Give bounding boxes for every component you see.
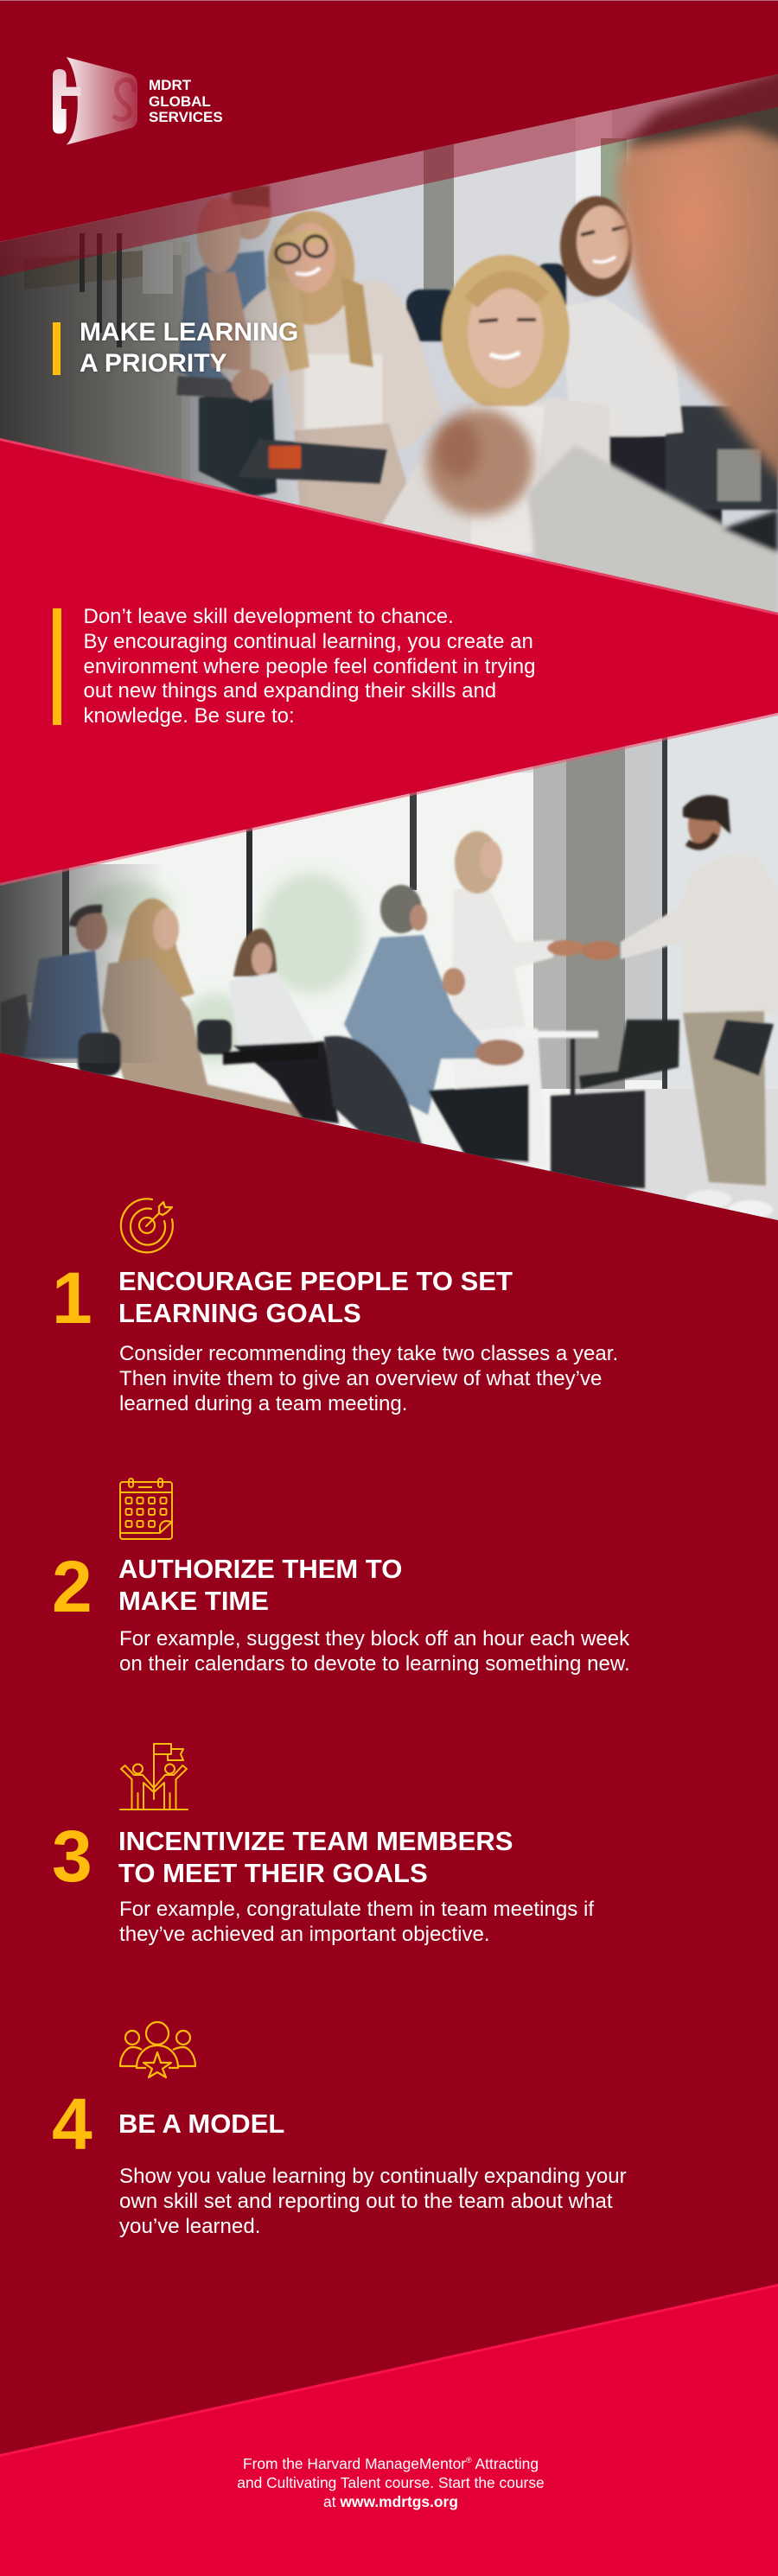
presenter foreground	[426, 60, 778, 516]
intro text: knowledge. Be sure to:	[83, 704, 295, 728]
footer band	[0, 2284, 778, 2576]
icon: target with arrow	[121, 1199, 173, 1252]
step 1 text: Then invite them to give an overview of what they’ve	[119, 1367, 602, 1390]
step 3 title	[118, 1826, 513, 1888]
step 3 text	[119, 1898, 595, 1946]
step 1 text	[119, 1342, 618, 1415]
desk and phone	[238, 439, 387, 484]
step 2 title: AUTHORIZE THEM TO	[118, 1554, 402, 1584]
step 1 text: Consider recommending they take two classes a year.	[119, 1342, 618, 1365]
footer credit: From the Harvard ManageMentor® Attracting	[243, 2455, 539, 2472]
step 4 text: you’ve learned.	[119, 2215, 260, 2238]
step 3 title: INCENTIVIZE TEAM MEMBERS	[118, 1826, 513, 1856]
top photo: seminar audience	[0, 60, 778, 622]
intro text	[83, 605, 535, 728]
step 1 text: learned during a team meeting.	[119, 1392, 408, 1415]
top edge line	[0, 0, 778, 1]
left dark overlay	[0, 181, 299, 505]
chairs	[406, 289, 458, 341]
logo wordmark: SERVICES	[149, 109, 223, 125]
standing woman	[451, 1028, 546, 1170]
step 2 title	[118, 1554, 402, 1616]
step 2 text: on their calendars to devote to learning something new.	[119, 1652, 630, 1676]
intro text: By encouraging continual learning, you create an	[83, 630, 533, 653]
standing man	[621, 855, 778, 1014]
number 1: 1	[52, 1257, 92, 1339]
intro accent bar	[53, 608, 61, 725]
heading: MAKE LEARNING	[80, 318, 298, 347]
heading: A PRIORITY	[80, 349, 227, 378]
step 4 text	[119, 2165, 627, 2238]
table and chair	[516, 1031, 598, 1038]
step 1 title	[118, 1266, 513, 1328]
blonde woman	[212, 281, 443, 449]
footer credit	[237, 2455, 545, 2510]
grey-haired man	[344, 935, 484, 1115]
logo mark	[53, 57, 137, 145]
blonde woman centre	[380, 398, 610, 553]
step 1 title: LEARNING GOALS	[118, 1298, 361, 1328]
heading accent bar	[53, 322, 61, 375]
intro text: out new things and expanding their skills and	[83, 679, 496, 703]
logo wordmark: MDRT	[149, 77, 191, 93]
man in blue	[177, 251, 272, 385]
red intro panel	[0, 438, 778, 883]
footer credit: and Cultivating Talent course. Start the course	[237, 2474, 545, 2491]
step 4 text: own skill set and reporting out to the team about what	[119, 2190, 613, 2213]
brunette woman	[562, 298, 683, 436]
step 3 title: TO MEET THEIR GOALS	[118, 1858, 428, 1888]
intro text: Don’t leave skill development to chance.	[83, 605, 454, 628]
step 2 text	[119, 1627, 630, 1676]
logo wordmark	[149, 77, 223, 125]
step 1 title: ENCOURAGE PEOPLE TO SET	[118, 1266, 513, 1296]
heading	[80, 318, 299, 378]
icon: calendar	[120, 1479, 172, 1539]
number 3: 3	[52, 1816, 92, 1897]
step 4 text: Show you value learning by continually expanding your	[119, 2165, 627, 2188]
seated people	[0, 994, 31, 1058]
step 4 title: BE A MODEL	[118, 2109, 284, 2139]
step 3 text: they’ve achieved an important objective.	[119, 1923, 490, 1946]
icon: team with flag	[120, 1744, 188, 1810]
raised hand	[206, 272, 251, 372]
intro text: environment where people feel confident in trying	[83, 655, 535, 678]
footer credit: at www.mdrtgs.org	[323, 2493, 458, 2510]
number 2: 2	[52, 1546, 92, 1627]
icon: team with star	[120, 2022, 195, 2077]
step 2 text: For example, suggest they block off an hour each week	[119, 1627, 629, 1651]
logo wordmark: GLOBAL	[149, 93, 211, 109]
translucent red band	[0, 74, 778, 277]
step 2 title: MAKE TIME	[118, 1586, 269, 1616]
second photo: handshake	[0, 709, 778, 1227]
number 4: 4	[52, 2083, 92, 2165]
step 3 text: For example, congratulate them in team meetings if	[119, 1898, 594, 1921]
